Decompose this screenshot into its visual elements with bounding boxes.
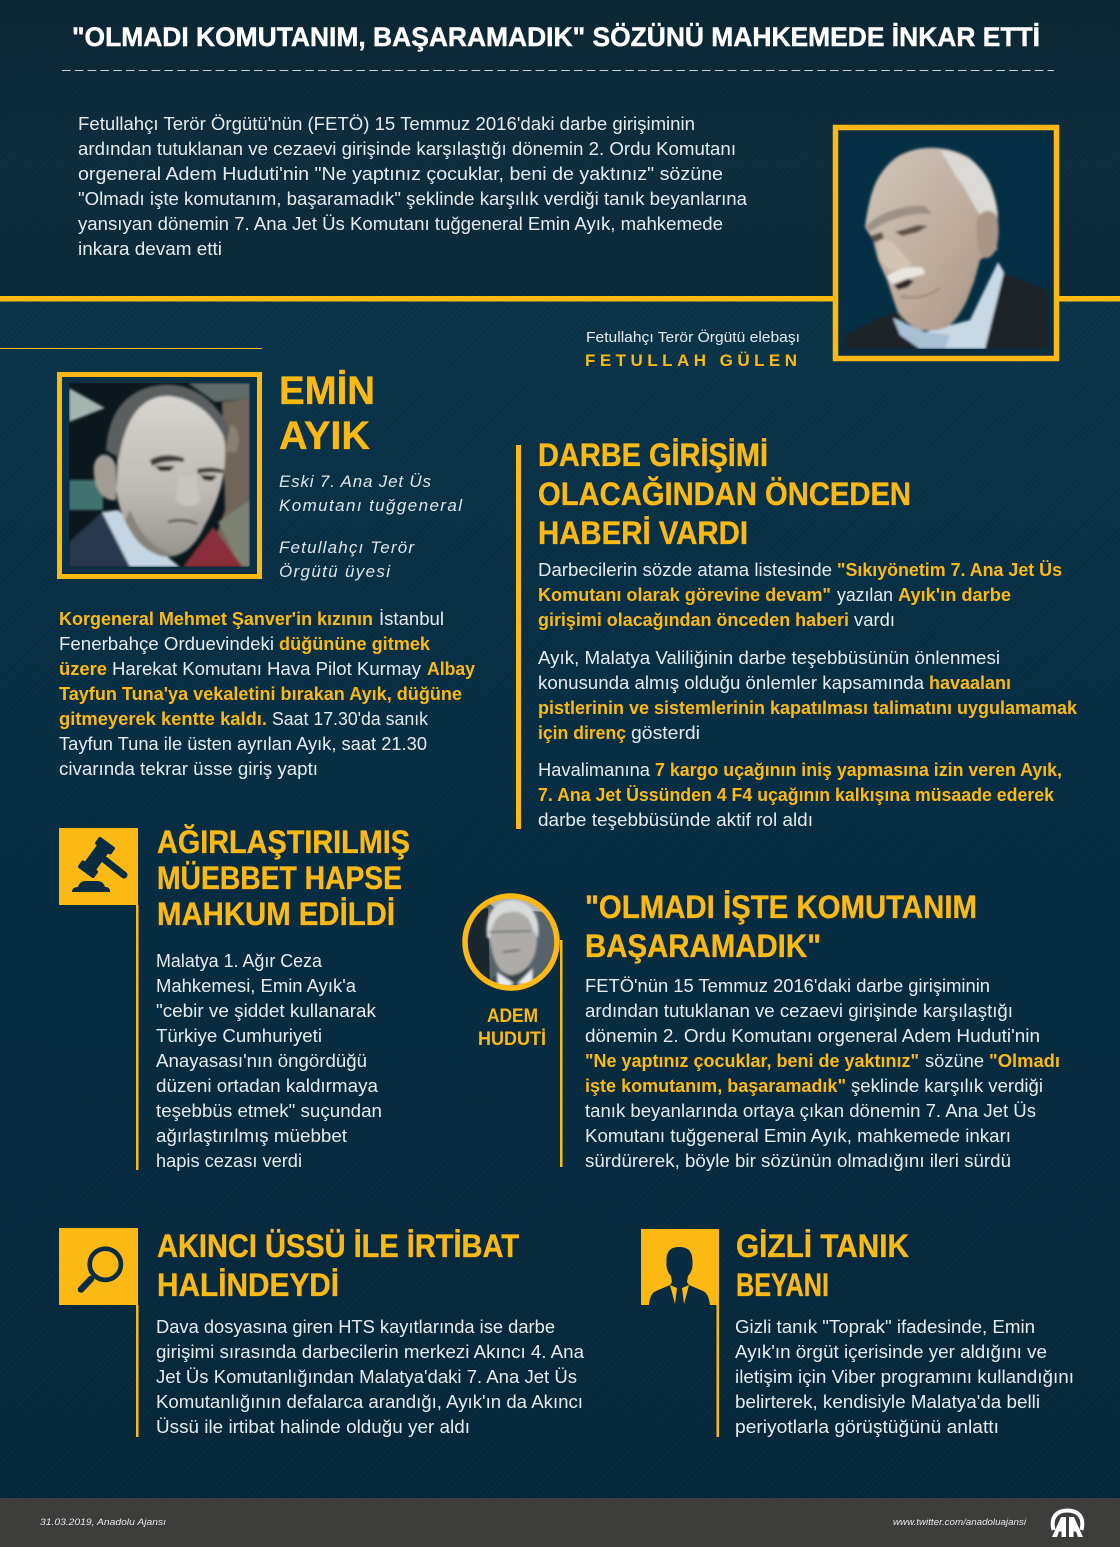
role text: Emin Ayık: Örgütü üyesi bbox=[279, 562, 391, 581]
heading: quote: BAŞARAMADIK" bbox=[585, 928, 821, 964]
role text: Emin Ayık: Fetullahçı Terör bbox=[279, 538, 415, 557]
text block: prior knowledge: Havalimanına bbox=[538, 760, 651, 780]
text block: wedding: üzere bbox=[59, 659, 107, 679]
text block: quote: tanık beyanlarında ortaya çıkan dönemin 7. Ana Jet Üs bbox=[585, 1101, 1036, 1121]
intro text: "Olmadı işte komutanım, başaramadık" şeklinde karşılık verdiği tanık beyanlarına bbox=[78, 189, 748, 209]
text block: prior knowledge: için direnç bbox=[538, 723, 626, 743]
text block: prior knowledge: Komutanı olarak görevine devam" bbox=[538, 585, 831, 605]
text block: sentence: hapis cezası verdi bbox=[156, 1151, 302, 1171]
text block: wedding: düğününe gitmek bbox=[279, 634, 431, 654]
role text: Emin Ayık bbox=[279, 472, 463, 581]
text block: sentence: Mahkemesi, Emin Ayık'a bbox=[156, 976, 357, 996]
text block: wedding: Albay bbox=[427, 659, 475, 679]
text block: sentence: Türkiye Cumhuriyeti bbox=[156, 1026, 322, 1046]
name: Emin Ayık: EMİN bbox=[279, 369, 375, 413]
icon: magnifying glass bbox=[59, 1228, 138, 1305]
text block: wedding: gitmeyerek kentte kaldı. bbox=[59, 709, 267, 729]
heading: sentence: AĞIRLAŞTIRILMIŞ bbox=[157, 824, 410, 860]
name: Adem Huduti bbox=[478, 1006, 546, 1050]
background header band bbox=[0, 0, 1120, 296]
heading: Akıncı: HALİNDEYDİ bbox=[157, 1267, 339, 1303]
caption: Fetullah Gülen bbox=[585, 328, 800, 370]
caption: Fetullah Gülen: Fetullahçı Terör Örgütü elebaşı bbox=[586, 328, 800, 346]
text block: wedding: Korgeneral Mehmet Şanver'in kızının bbox=[59, 609, 373, 629]
text block: secret witness: periyotlarla görüştüğünü anlattı bbox=[735, 1417, 999, 1437]
role text: Emin Ayık: Komutanı tuğgeneral bbox=[279, 496, 463, 515]
text block: prior knowledge: Ayık, Malatya Valiliğinin darbe teşebbüsünün önlenmesi bbox=[538, 648, 1000, 668]
heading: Akıncı bbox=[157, 1228, 519, 1303]
text block: Akıncı: Jet Üs Komutanlığından Malatya'daki 7. Ana Jet Üs bbox=[156, 1367, 577, 1387]
text block: wedding: Tayfun Tuna'ya vekaletini bırakan Ayık, düğüne bbox=[59, 684, 462, 704]
text block: sentence: düzeni ortadan kaldırmaya bbox=[156, 1076, 379, 1096]
heading: secret witness: GİZLİ TANIK bbox=[736, 1228, 909, 1264]
name: Emin Ayık: AYIK bbox=[279, 414, 370, 458]
text block: wedding: Fenerbahçe Orduevindeki bbox=[59, 634, 274, 654]
text block: quote: ardından tutuklanan ve cezaevi girişinde karşılaştığı bbox=[585, 1001, 1013, 1021]
panel: secret witness bbox=[641, 1228, 1074, 1437]
header divider line bbox=[0, 296, 1120, 302]
intro text: ardından tutuklanan ve cezaevi girişinde karşılaştığı dönemin 2. Ordu Komutanı bbox=[78, 139, 736, 159]
text block: prior knowledge: havaalanı bbox=[929, 673, 1011, 693]
text block: quote: işte komutanım, başaramadık" bbox=[585, 1076, 846, 1096]
footer bar bbox=[0, 1498, 1120, 1547]
text block: quote: şeklinde karşılık verdiği bbox=[851, 1076, 1043, 1096]
icon: Anadolu Agency logo bbox=[1052, 1510, 1083, 1537]
text block: secret witness: belirterek, kendisiyle Malatya'da belli bbox=[735, 1392, 1040, 1412]
photo: Adem Huduti bbox=[465, 896, 557, 990]
text block: quote: "Olmadı bbox=[989, 1051, 1060, 1071]
text block: quote: sözüne bbox=[925, 1051, 984, 1071]
heading: sentence: MÜEBBET HAPSE bbox=[157, 860, 402, 896]
text block: prior knowledge: pistlerinin ve sistemlerinin kapatılması talimatını uygulamamak bbox=[538, 698, 1078, 718]
icon: gavel bbox=[59, 828, 138, 905]
panel: sentence bbox=[59, 824, 410, 1171]
text block: prior knowledge: darbe teşebbüsünde aktif rol aldı bbox=[538, 810, 813, 830]
text block: quote: sürdürerek, böyle bir sözünün olmadığını ileri sürdü bbox=[585, 1151, 1011, 1171]
text block: quote: dönemin 2. Ordu Komutanı orgeneral Adem Huduti'nin bbox=[585, 1026, 1040, 1046]
text block: sentence: teşebbüs etmek" suçundan bbox=[156, 1101, 382, 1121]
heading: prior knowledge bbox=[538, 437, 911, 551]
intro text: Fetullahçı Terör Örgütü'nün (FETÖ) 15 Temmuz 2016'daki darbe girişiminin bbox=[78, 114, 695, 134]
footer date credit: 31.03.2019, Anadolu Ajansı bbox=[40, 1517, 166, 1528]
text block: prior knowledge: 7. Ana Jet Üssünden 4 F4 uçağının kalkışına müsaade ederek bbox=[538, 785, 1055, 805]
heading: quote bbox=[585, 889, 977, 964]
text block: wedding bbox=[59, 609, 475, 779]
heading: prior knowledge: DARBE GİRİŞİMİ bbox=[538, 437, 768, 473]
photo: Emin Ayık bbox=[60, 374, 260, 576]
name: Emin Ayık bbox=[279, 369, 375, 458]
text block: prior knowledge: vardı bbox=[854, 610, 895, 630]
text block: prior knowledge: yazılan bbox=[837, 585, 893, 605]
panel: Akıncı base contact bbox=[59, 1228, 585, 1437]
text block: wedding: Harekat Komutanı Hava Pilot Kurmay bbox=[112, 659, 421, 679]
intro text bbox=[78, 114, 748, 259]
heading: prior knowledge: HABERİ VARDI bbox=[538, 515, 748, 551]
text block: Akıncı: Dava dosyasına giren HTS kayıtlarında ise darbe bbox=[156, 1317, 555, 1337]
text block: Akıncı bbox=[156, 1317, 585, 1437]
text block: prior knowledge: konusunda almış olduğu önlemler kapsamında bbox=[538, 673, 925, 693]
text block: prior knowledge: girişimi olacağından önceden haberi bbox=[538, 610, 849, 630]
text block: prior knowledge: gösterdi bbox=[631, 723, 700, 743]
intro text: yansıyan dönemin 7. Ana Jet Üs Komutanı tuğgeneral Emin Ayık, mahkemede bbox=[78, 214, 723, 234]
icon: anonymous person bbox=[641, 1229, 719, 1305]
heading: secret witness: BEYANI bbox=[736, 1267, 829, 1303]
text block: quote bbox=[585, 976, 1060, 1171]
heading: sentence: MAHKUM EDİLDİ bbox=[157, 896, 395, 932]
name: Adem Huduti: HUDUTİ bbox=[478, 1029, 546, 1050]
text block: sentence: Anayasası'nın öngördüğü bbox=[156, 1051, 367, 1071]
panel: prior knowledge of the coup bbox=[516, 437, 1078, 830]
heading: quote: "OLMADI İŞTE KOMUTANIM bbox=[585, 889, 977, 925]
footer twitter url: www.twitter.com/anadoluajansi bbox=[893, 1517, 1027, 1528]
text block: Akıncı: Komutanlığının defalarca arandığı, Ayık'ın da Akıncı bbox=[156, 1392, 583, 1412]
heading: sentence bbox=[157, 824, 410, 932]
name: Adem Huduti: ADEM bbox=[487, 1006, 538, 1027]
text block: Akıncı: Üssü ile irtibat halinde olduğu yer aldı bbox=[156, 1417, 470, 1437]
caption: Fetullah Gülen: FETULLAH GÜLEN bbox=[585, 351, 797, 370]
role text: Emin Ayık: Eski 7. Ana Jet Üs bbox=[279, 472, 432, 491]
panel: Adem Huduti quote bbox=[465, 889, 1060, 1171]
intro text: orgeneral Adem Huduti'nin "Ne yaptınız çocuklar, beni de yaktınız" sözüne bbox=[78, 164, 723, 184]
text block: Akıncı: girişimi sırasında darbecilerin merkezi Akıncı 4. Ana bbox=[156, 1342, 585, 1362]
text block: secret witness bbox=[735, 1317, 1074, 1437]
text block: sentence bbox=[156, 951, 382, 1171]
text block: prior knowledge: Ayık'ın darbe bbox=[898, 585, 1011, 605]
text block: prior knowledge: 7 kargo uçağının iniş yapmasına izin veren Ayık, bbox=[655, 760, 1062, 780]
photo: Fetullah Gülen bbox=[836, 128, 1056, 358]
heading: secret witness bbox=[736, 1228, 909, 1303]
heading: Akıncı: AKINCI ÜSSÜ İLE İRTİBAT bbox=[157, 1228, 519, 1264]
text block: quote: "Ne yaptınız çocuklar, beni de yaktınız" bbox=[585, 1051, 919, 1071]
text block: quote: FETÖ'nün 15 Temmuz 2016'daki darbe girişiminin bbox=[585, 976, 990, 996]
text block: secret witness: Gizli tanık "Toprak" ifadesinde, Emin bbox=[735, 1317, 1035, 1337]
text block: wedding: civarında tekrar üsse giriş yaptı bbox=[59, 759, 318, 779]
background lower bbox=[0, 296, 1120, 1498]
text block: sentence: ağırlaştırılmış müebbet bbox=[156, 1126, 347, 1146]
text block: sentence: Malatya 1. Ağır Ceza bbox=[156, 951, 323, 971]
text block: prior knowledge: "Sıkıyönetim 7. Ana Jet Üs bbox=[837, 560, 1062, 580]
text block: wedding: Saat 17.30'da sanık bbox=[272, 709, 429, 729]
text block: prior knowledge bbox=[538, 560, 1078, 830]
heading: prior knowledge: OLACAĞINDAN ÖNCEDEN bbox=[538, 476, 911, 512]
intro text: inkara devam etti bbox=[78, 239, 222, 259]
text block: wedding: Tayfun Tuna ile üsten ayrılan Ayık, saat 21.30 bbox=[59, 734, 427, 754]
title: "OLMADI KOMUTANIM, BAŞARAMADIK" SÖZÜNÜ MAHKEMEDE İNKAR ETTİ bbox=[72, 22, 1040, 52]
text block: prior knowledge: Darbecilerin sözde atama listesinde bbox=[538, 560, 832, 580]
text block: quote: Komutanı tuğgeneral Emin Ayık, mahkemede inkarı bbox=[585, 1126, 1011, 1146]
text block: secret witness: Ayık'ın örgüt içerisinde yer aldığını ve bbox=[735, 1342, 1047, 1362]
text block: secret witness: iletişim için Viber programını kullandığını bbox=[735, 1367, 1074, 1387]
text block: wedding: İstanbul bbox=[379, 609, 444, 629]
text block: sentence: "cebir ve şiddet kullanarak bbox=[156, 1001, 377, 1021]
